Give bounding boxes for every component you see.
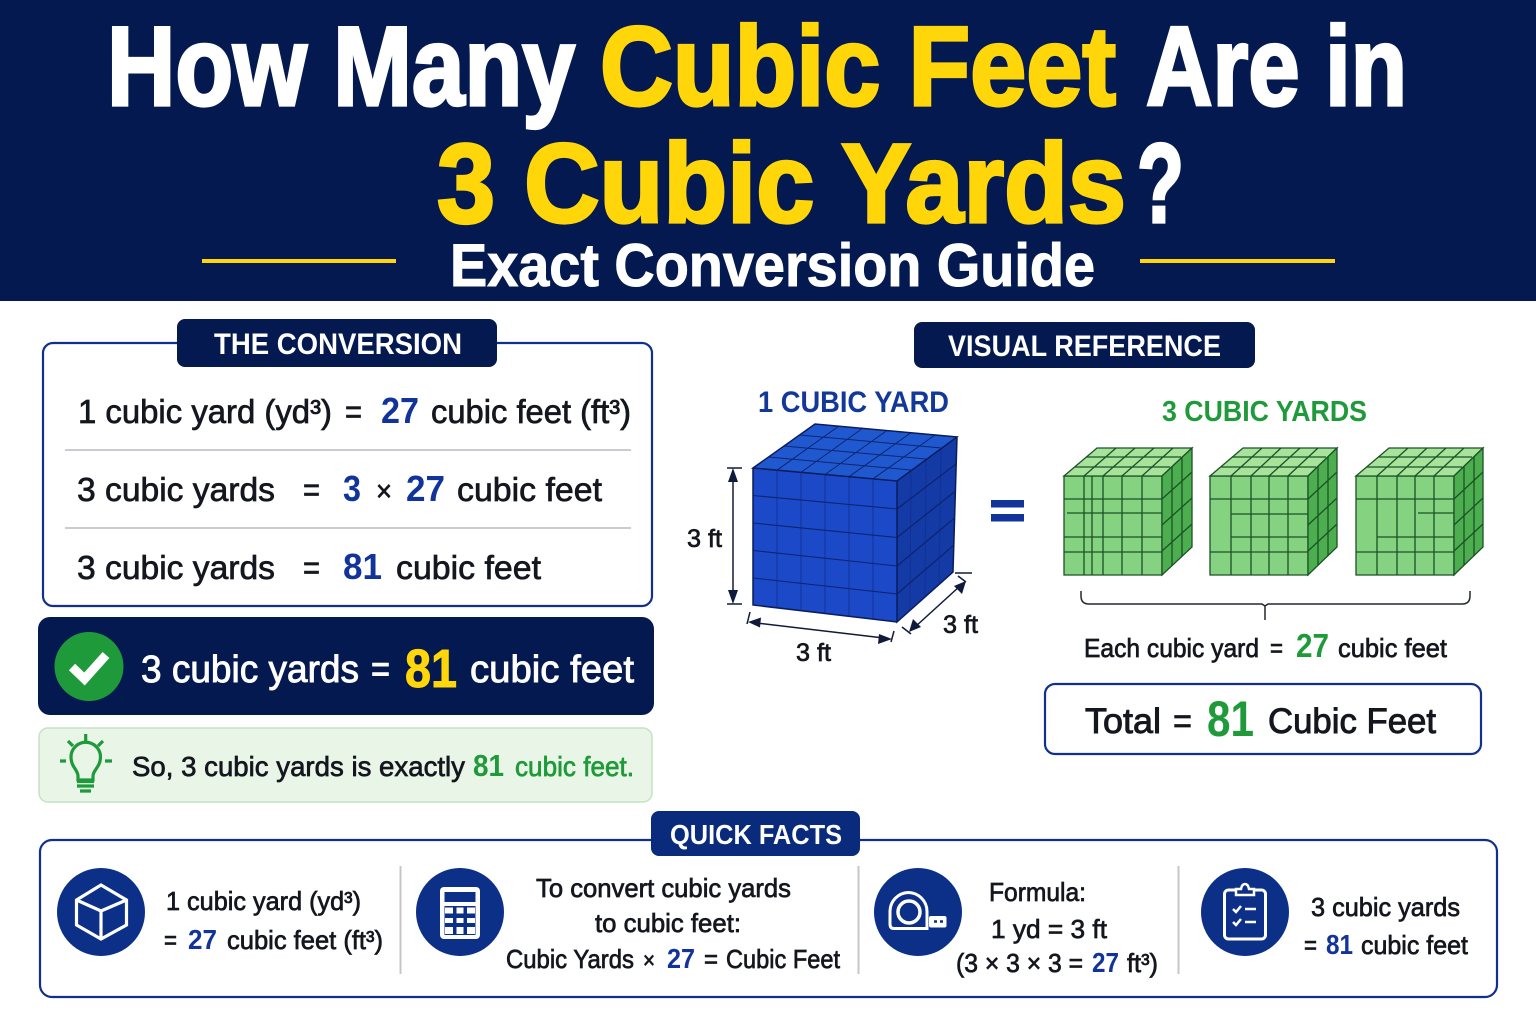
- heading: the conversion: THE CONVERSION: [214, 328, 462, 361]
- result text: cubic feet: [470, 649, 634, 691]
- fact 3 text: Formula:: [989, 877, 1086, 907]
- row 3: cubic feet: [396, 549, 541, 586]
- label: 1 cubic yard: 1 CUBIC YARD: [758, 386, 949, 419]
- dimension: height 3 ft: 3 ft: [687, 525, 722, 553]
- fact 2 text: Cubic Feet: [726, 944, 841, 974]
- fact 4 text: 3 cubic yards: [1311, 892, 1460, 922]
- fact 3 text: 27: [1092, 947, 1119, 978]
- dimension: height 3 ft: [687, 468, 742, 604]
- fact 2 text: [506, 873, 841, 974]
- dimension: depth 3 ft: [902, 573, 978, 639]
- result text: =: [371, 649, 390, 691]
- total box: Total: [1085, 702, 1161, 741]
- fact 3 text: [956, 877, 1158, 978]
- row 1: 27: [381, 390, 419, 431]
- row 2: [77, 468, 602, 509]
- icon: clipboard: [1201, 868, 1289, 956]
- title line 1: [107, 4, 1407, 129]
- dimension: width 3 ft: [747, 612, 894, 667]
- green cube 1: [1064, 448, 1192, 575]
- each cubic yard text: =: [1270, 633, 1283, 663]
- row 2: cubic feet: [457, 471, 602, 508]
- result bar: [38, 617, 654, 715]
- panel: the conversion: [43, 319, 652, 606]
- icon: cube: [57, 868, 145, 956]
- fact 2 text: 27: [667, 943, 695, 974]
- total box: Cubic Feet: [1268, 702, 1436, 741]
- row 1: cubic feet (ft³): [431, 393, 631, 430]
- callout text: [132, 748, 634, 783]
- subtitle: Exact Conversion Guide: [450, 232, 1095, 299]
- row 1: 1 cubic yard (yd³): [78, 393, 332, 430]
- heading: visual reference: [914, 322, 1255, 368]
- panel: quick facts: [40, 811, 1497, 997]
- result text: 81: [405, 639, 457, 699]
- fact 3 text: 1 yd = 3 ft: [991, 914, 1108, 944]
- row 2: 3: [343, 468, 361, 509]
- fact 1 text: 1 cubic yard (yd³): [166, 886, 361, 916]
- row 3: 3 cubic yards: [77, 549, 275, 586]
- total box: [1045, 684, 1481, 754]
- fact 4 text: 81: [1326, 929, 1353, 960]
- row 1: =: [345, 393, 362, 430]
- title line 2: 3 Cubic Yards: [437, 121, 1126, 246]
- title line 1: How Many: [107, 4, 575, 129]
- fact 1 text: cubic feet (ft³): [227, 925, 383, 955]
- fact 1 text: [164, 886, 383, 955]
- total box: =: [1173, 702, 1192, 741]
- icon: green check: [54, 632, 124, 701]
- fact 3 text: ft³): [1127, 948, 1158, 978]
- row 3: [77, 546, 541, 587]
- each cubic yard text: [1084, 627, 1448, 664]
- total box: 81: [1207, 691, 1254, 747]
- fact 2 text: Cubic Yards: [506, 944, 634, 974]
- fact 1 text: =: [164, 925, 177, 955]
- title line 1: Are in: [1146, 4, 1407, 129]
- callout text: So, 3 cubic yards is exactly: [132, 751, 465, 782]
- fact 2 text: ×: [643, 947, 655, 973]
- fact 1 text: 27: [188, 924, 217, 955]
- title line 2: ?: [1137, 121, 1184, 246]
- each cubic yard text: Each cubic yard: [1084, 633, 1259, 663]
- row 2: 3 cubic yards: [77, 471, 275, 508]
- callout text: cubic feet.: [515, 751, 634, 782]
- dimension: width 3 ft: 3 ft: [796, 639, 831, 667]
- icon: calculator: [416, 868, 504, 956]
- brace: [1081, 591, 1470, 620]
- heading: quick facts: [651, 811, 860, 856]
- heading: quick facts: QUICK FACTS: [670, 819, 842, 850]
- green cube 2: [1210, 448, 1337, 575]
- row 3: 81: [343, 546, 382, 587]
- row 3: =: [303, 549, 320, 586]
- each cubic yard text: cubic feet: [1338, 633, 1448, 663]
- each cubic yard text: 27: [1296, 627, 1329, 664]
- fact 3 text: (3 × 3 × 3 =: [956, 948, 1083, 978]
- dimension: depth 3 ft: 3 ft: [943, 611, 978, 639]
- result text: 3 cubic yards: [141, 649, 359, 691]
- result text: [141, 639, 634, 699]
- fact 2 text: To convert cubic yards: [536, 873, 791, 903]
- row 2: 27: [406, 468, 445, 509]
- title line 1: Cubic Feet: [600, 4, 1116, 129]
- fact 4 text: cubic feet: [1361, 930, 1469, 960]
- green cube 3: [1356, 448, 1483, 575]
- row 1: [78, 390, 631, 431]
- callout text: 81: [473, 748, 504, 783]
- equals sign: [991, 500, 1024, 522]
- heading: the conversion: [177, 319, 497, 367]
- icon: tape measure: [874, 868, 962, 956]
- fact 4 text: =: [1304, 930, 1317, 960]
- label: 3 cubic yards: 3 CUBIC YARDS: [1162, 396, 1367, 428]
- row 2: ×: [376, 475, 392, 508]
- fact 2 text: =: [704, 944, 718, 974]
- header banner: [0, 0, 1536, 301]
- callout: exact answer: [39, 728, 652, 802]
- fact 2 text: to cubic feet:: [595, 908, 741, 938]
- icon: light bulb: [60, 734, 112, 791]
- heading: visual reference: VISUAL REFERENCE: [948, 330, 1221, 363]
- fact 4 text: [1304, 892, 1469, 960]
- row 2: =: [303, 471, 320, 508]
- blue cube: [753, 424, 957, 622]
